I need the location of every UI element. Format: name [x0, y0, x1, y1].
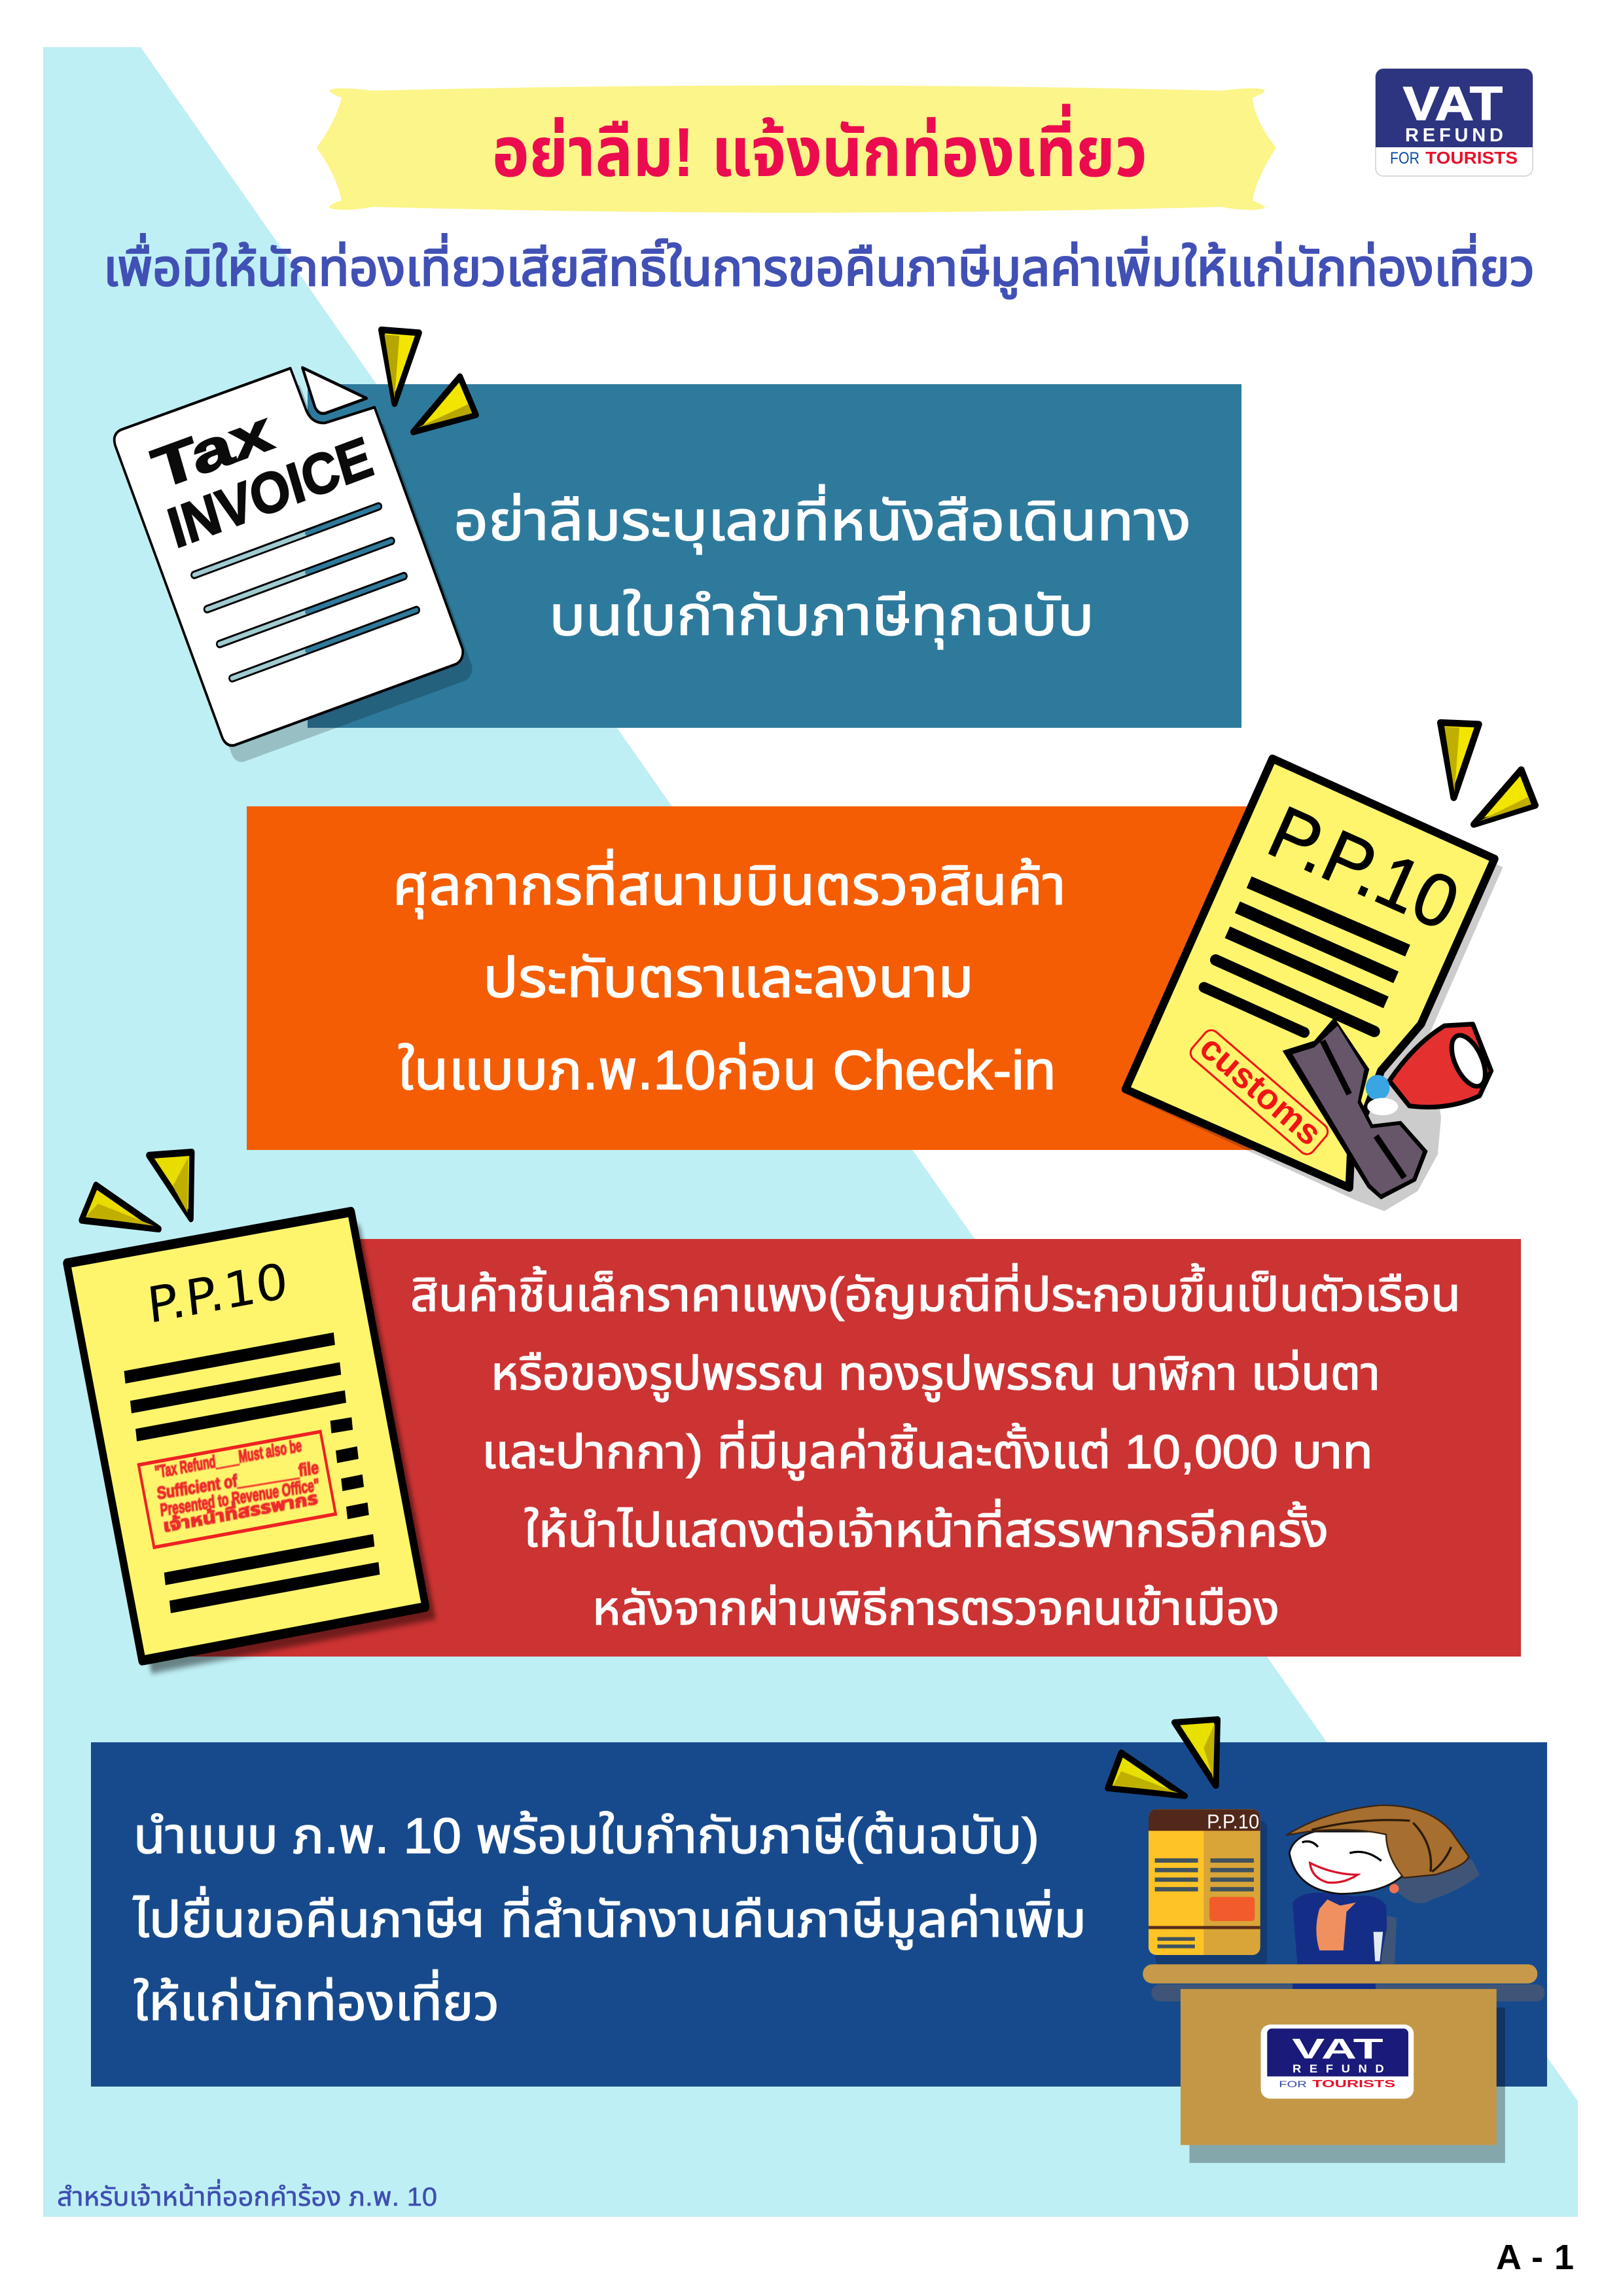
panel text: [410, 1263, 1461, 1635]
panel text: ให้นำไปแสดงต่อเจ้าหน้าที่สรรพากรอีกครั้ง: [524, 1499, 1329, 1557]
desk sign logo: [1261, 2024, 1414, 2099]
panel text: บนใบกำกับภาษีทุกฉบับ: [549, 585, 1094, 649]
icon: attention sparks: [381, 330, 476, 432]
stamp handle: [1283, 1017, 1428, 1200]
icon: attention sparks: [1108, 1719, 1217, 1796]
icon: P.P.10 form with customs stamp: [1126, 723, 1535, 1211]
panel text: สินค้าชิ้นเล็กราคาแพง(อัญมณีที่ประกอบขึ้นเป็นตัวเรือน: [410, 1263, 1461, 1321]
icon: tax invoice document: [115, 330, 476, 762]
counter desk: [1143, 1964, 1544, 2163]
panel text: ศุลกากรที่สนามบินตรวจสินค้า: [393, 849, 1066, 919]
panel text: และปากกา) ที่มีมูลค่าชิ้นละตั้งแต่ 10,000 บาท: [482, 1420, 1373, 1480]
icon: tax invoice document: INVOICE: [161, 425, 379, 560]
panel text: [454, 484, 1191, 649]
icon: tax invoice document: Tax: [145, 399, 279, 501]
panel: passport number reminder: [308, 384, 1241, 728]
subtitle: เพื่อมิให้นักท่องเที่ยวเสียสิทธิ์ในการขอคืนภาษีมูลค่าเพิ่มให้แก่นักท่องเที่ยว: [103, 234, 1535, 299]
panel text: [133, 1808, 1086, 2031]
desk sign logo: TOURISTS: [1312, 2078, 1395, 2090]
icon: attention sparks: [1440, 723, 1535, 825]
banner shape: [317, 85, 1276, 213]
title banner: [317, 85, 1276, 213]
panel text: ในแบบภ.พ.10ก่อน Check-in: [398, 1039, 1056, 1101]
icon: P.P.10 form with customs stamp: customs: [1192, 1028, 1329, 1153]
page number: A - 1: [1496, 2238, 1574, 2277]
icon: P.P.10 form with red note: "Tax Refund____Must also be: [154, 1436, 302, 1482]
panel text: ให้แก่นักท่องเที่ยว: [134, 1969, 499, 2031]
logo: VAT refund for tourists: VAT: [1403, 78, 1503, 130]
footer note: สำหรับเจ้าหน้าที่ออกคำร้อง ภ.พ. 10: [57, 2179, 437, 2212]
P.P.10 booklet: P.P.10: [1207, 1811, 1259, 1833]
panel text: หรือของรูปพรรณ ทองรูปพรรณ นาฬิกา แว่นตา: [491, 1348, 1380, 1402]
logo: VAT refund for tourists: [1376, 69, 1533, 176]
title text: อย่าลืม! แจ้งนักท่องเที่ยว: [492, 104, 1147, 191]
logo: VAT refund for tourists: TOURISTS: [1425, 148, 1518, 168]
panel text: อย่าลืมระบุเลขที่หนังสือเดินทาง: [454, 484, 1191, 554]
panel text: นำแบบ ภ.พ. 10 พร้อมใบกำกับภาษี(ต้นฉบับ): [134, 1808, 1039, 1864]
icon: P.P.10 form with customs stamp: P.P.10: [1257, 790, 1471, 946]
panel text: ไปยื่นขอคืนภาษีฯ ที่สำนักงานคืนภาษีมูลค่าเพิ่ม: [133, 1886, 1086, 1950]
logo: VAT refund for tourists: REFUND: [1405, 125, 1503, 146]
desk sign logo: REFUND: [1293, 2062, 1384, 2075]
desk sign logo: FOR: [1279, 2079, 1307, 2090]
icon: P.P.10 form with red note: Sufficient of________file: [156, 1458, 319, 1503]
P.P.10 booklet: [1149, 1809, 1267, 1967]
icon: attention sparks: [81, 1152, 192, 1229]
officer: [1286, 1805, 1480, 1964]
icon: P.P.10 form with red note: Presented to Revenue Office": [159, 1475, 320, 1520]
stamp knob: [1389, 1024, 1491, 1107]
illustration: VAT refund counter with officer: [1108, 1719, 1544, 2163]
icon: P.P.10 form with red note: P.P.10: [145, 1252, 291, 1335]
panel text: ประทับตราและลงนาม: [483, 947, 974, 1009]
panel: customs stamp: [247, 806, 1255, 1150]
panel: refund counter: [91, 1742, 1547, 2087]
desk sign logo: VAT: [1292, 2034, 1383, 2065]
panel text: [393, 849, 1066, 1101]
logo: VAT refund for tourists: FOR: [1390, 149, 1419, 168]
icon: P.P.10 form with red note: เจ้าหน้าที่สรรพากร: [162, 1485, 319, 1537]
icon: P.P.10 form with red note: [67, 1152, 436, 1674]
panel: high-value goods: [173, 1239, 1521, 1657]
panel text: หลังจากผ่านพิธีการตรวจคนเข้าเมือง: [592, 1583, 1279, 1635]
